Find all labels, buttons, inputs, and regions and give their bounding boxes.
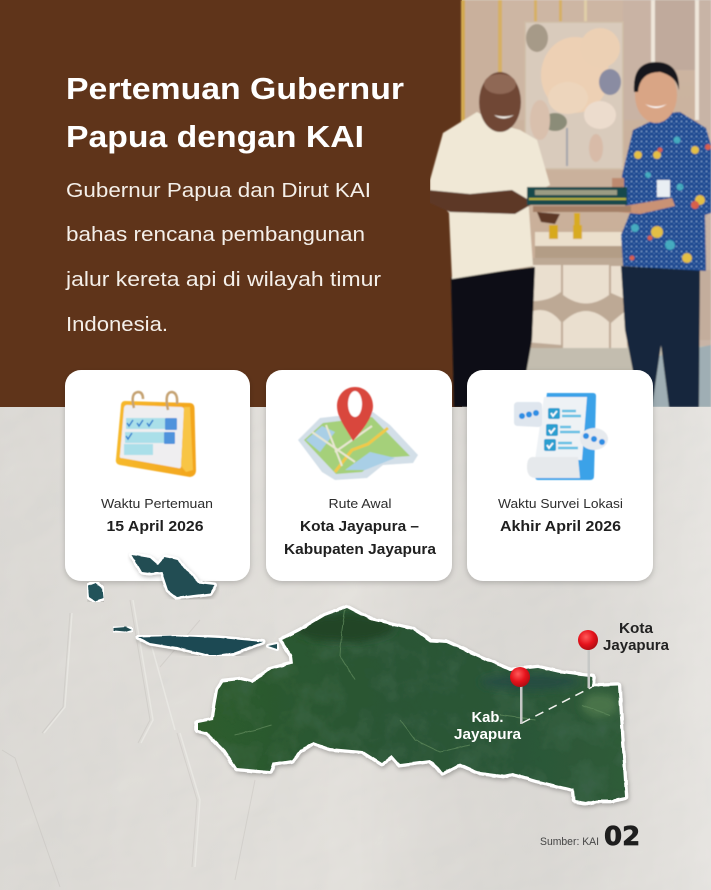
model train [527,187,631,212]
value: route: Kota Jayapura – [300,518,419,535]
label: kota jayapura: Kota [619,621,654,637]
flower painting [525,22,623,169]
label: kab jayapura: Kab. [472,710,504,726]
island: yapen [138,636,263,655]
governor: trousers [451,267,535,407]
island: small headland islet [268,644,277,649]
value: route [284,518,437,558]
sideboard and carpet [525,212,711,407]
value: akhir april 2026: Akhir April 2026 [500,518,621,535]
panel: waktu pertemuan [65,370,250,581]
label: kota jayapura: Jayapura [603,638,670,654]
KAI director: head [634,62,679,123]
map: papua [88,555,670,810]
source note: Sumber: KAI [540,836,599,848]
panel: rute awal [266,370,452,581]
icon: map with pin [298,387,418,480]
label: rute awal: Rute Awal [328,496,392,511]
value: 15 april 2026: 15 April 2026 [106,518,204,535]
wall panels [461,0,711,350]
photo: governor and KAI director holding a model train [428,0,711,407]
island: biak [132,555,215,597]
label: kab jayapura [454,710,522,743]
title [66,71,404,154]
pin: kab jayapura [510,667,530,724]
route: dashed line [522,687,592,723]
label: waktu pertemuan: Waktu Pertemuan [101,496,213,511]
icon: calendar [116,392,196,477]
title: Papua dengan KAI [66,119,364,154]
panel: waktu survei lokasi [467,370,653,581]
intro paragraph [65,180,381,336]
intro paragraph: Indonesia. [66,314,168,336]
value: route: Kabupaten Jayapura [284,541,437,558]
icon: checklist scroll [514,393,608,480]
intro paragraph: bahas rencana pembangunan [66,224,365,246]
map pin [337,387,373,441]
brown header panel [0,0,462,407]
label: kota jayapura [603,621,670,654]
island: small islet [114,627,132,632]
title: Pertemuan Gubernur [66,71,404,106]
KAI director: batik shirt [612,112,711,271]
pin: kota jayapura [578,630,598,688]
governor: shirt [430,112,550,279]
KAI director: trousers [621,266,700,407]
paper background [0,407,711,890]
page number: 02 [604,822,640,852]
label: waktu survei lokasi: Waktu Survei Lokasi [498,496,623,511]
mainland papua [190,600,630,810]
intro paragraph: jalur kereta api di wilayah timur [65,269,381,291]
intro paragraph: Gubernur Papua dan Dirut KAI [66,180,371,202]
island: supiori [88,583,103,601]
governor: head and arm [428,72,560,224]
label: kab jayapura: Jayapura [454,727,522,743]
